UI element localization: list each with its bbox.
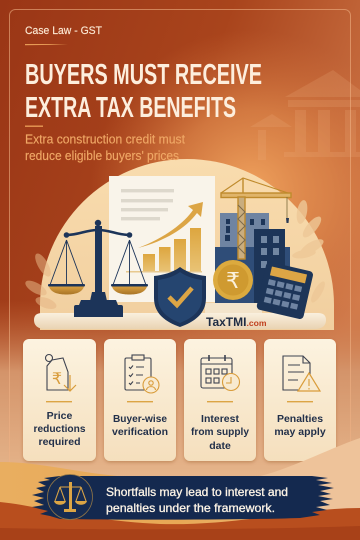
card: price reductions (23, 339, 96, 461)
buildings (215, 213, 290, 307)
card text: from supply (191, 426, 249, 438)
title (25, 59, 262, 124)
document with growth chart (109, 176, 215, 302)
decorative leaves right (291, 199, 327, 304)
decorative leaves left (23, 251, 58, 311)
title: EXTRA TAX BENEFITS (25, 92, 236, 124)
dome backdrop (40, 159, 334, 330)
arrow: growth (138, 202, 203, 248)
icon: shield with check (154, 267, 206, 327)
title: BUYERS MUST RECEIVE (25, 59, 262, 91)
temple watermark (250, 70, 360, 160)
eyebrow label: Case Law - GST (25, 25, 102, 37)
subtitle: Extra construction credit must (25, 132, 185, 146)
banner text (106, 486, 288, 515)
icon: rupee coin (213, 260, 253, 300)
card text: date (209, 440, 231, 452)
card text (34, 410, 86, 448)
card: interest from supply date (184, 339, 256, 461)
icon: calculator (256, 261, 314, 320)
platform (34, 303, 326, 329)
subtitle: reduce eligible buyers' prices (25, 149, 179, 163)
icon: price tag: ₹ (52, 369, 62, 388)
bar chart (143, 228, 201, 272)
construction crane (221, 178, 291, 259)
logo: TaxTMI.com (206, 315, 267, 329)
eyebrow rule (25, 44, 68, 45)
icon: gold scales badge (48, 474, 92, 520)
card text: reductions (34, 423, 86, 435)
card: buyer-wise verification (104, 339, 176, 461)
title rule (25, 126, 43, 127)
banner text: Shortfalls may lead to interest and (106, 486, 288, 499)
icon: clipboard with person (125, 355, 159, 393)
card text (274, 413, 326, 438)
subtitle (25, 132, 185, 163)
icon: scales of justice (48, 220, 148, 317)
card text: Interest (201, 413, 239, 425)
callout banner (32, 474, 334, 520)
card: penalties may apply (264, 339, 336, 461)
card text: required (38, 436, 81, 448)
card text: verification (112, 426, 168, 438)
card text: Penalties (277, 413, 323, 425)
card text (191, 413, 249, 452)
card text: may apply (274, 426, 326, 438)
card text: Price (47, 410, 73, 422)
bottom swoosh (0, 438, 360, 540)
card text (112, 413, 168, 438)
banner text: penalties under the framework. (106, 502, 275, 515)
card text: Buyer-wise (113, 413, 167, 425)
icon: rupee coin: ₹ (226, 269, 240, 294)
icon: calendar with clock (201, 355, 240, 390)
icon: document with warning (283, 356, 320, 391)
